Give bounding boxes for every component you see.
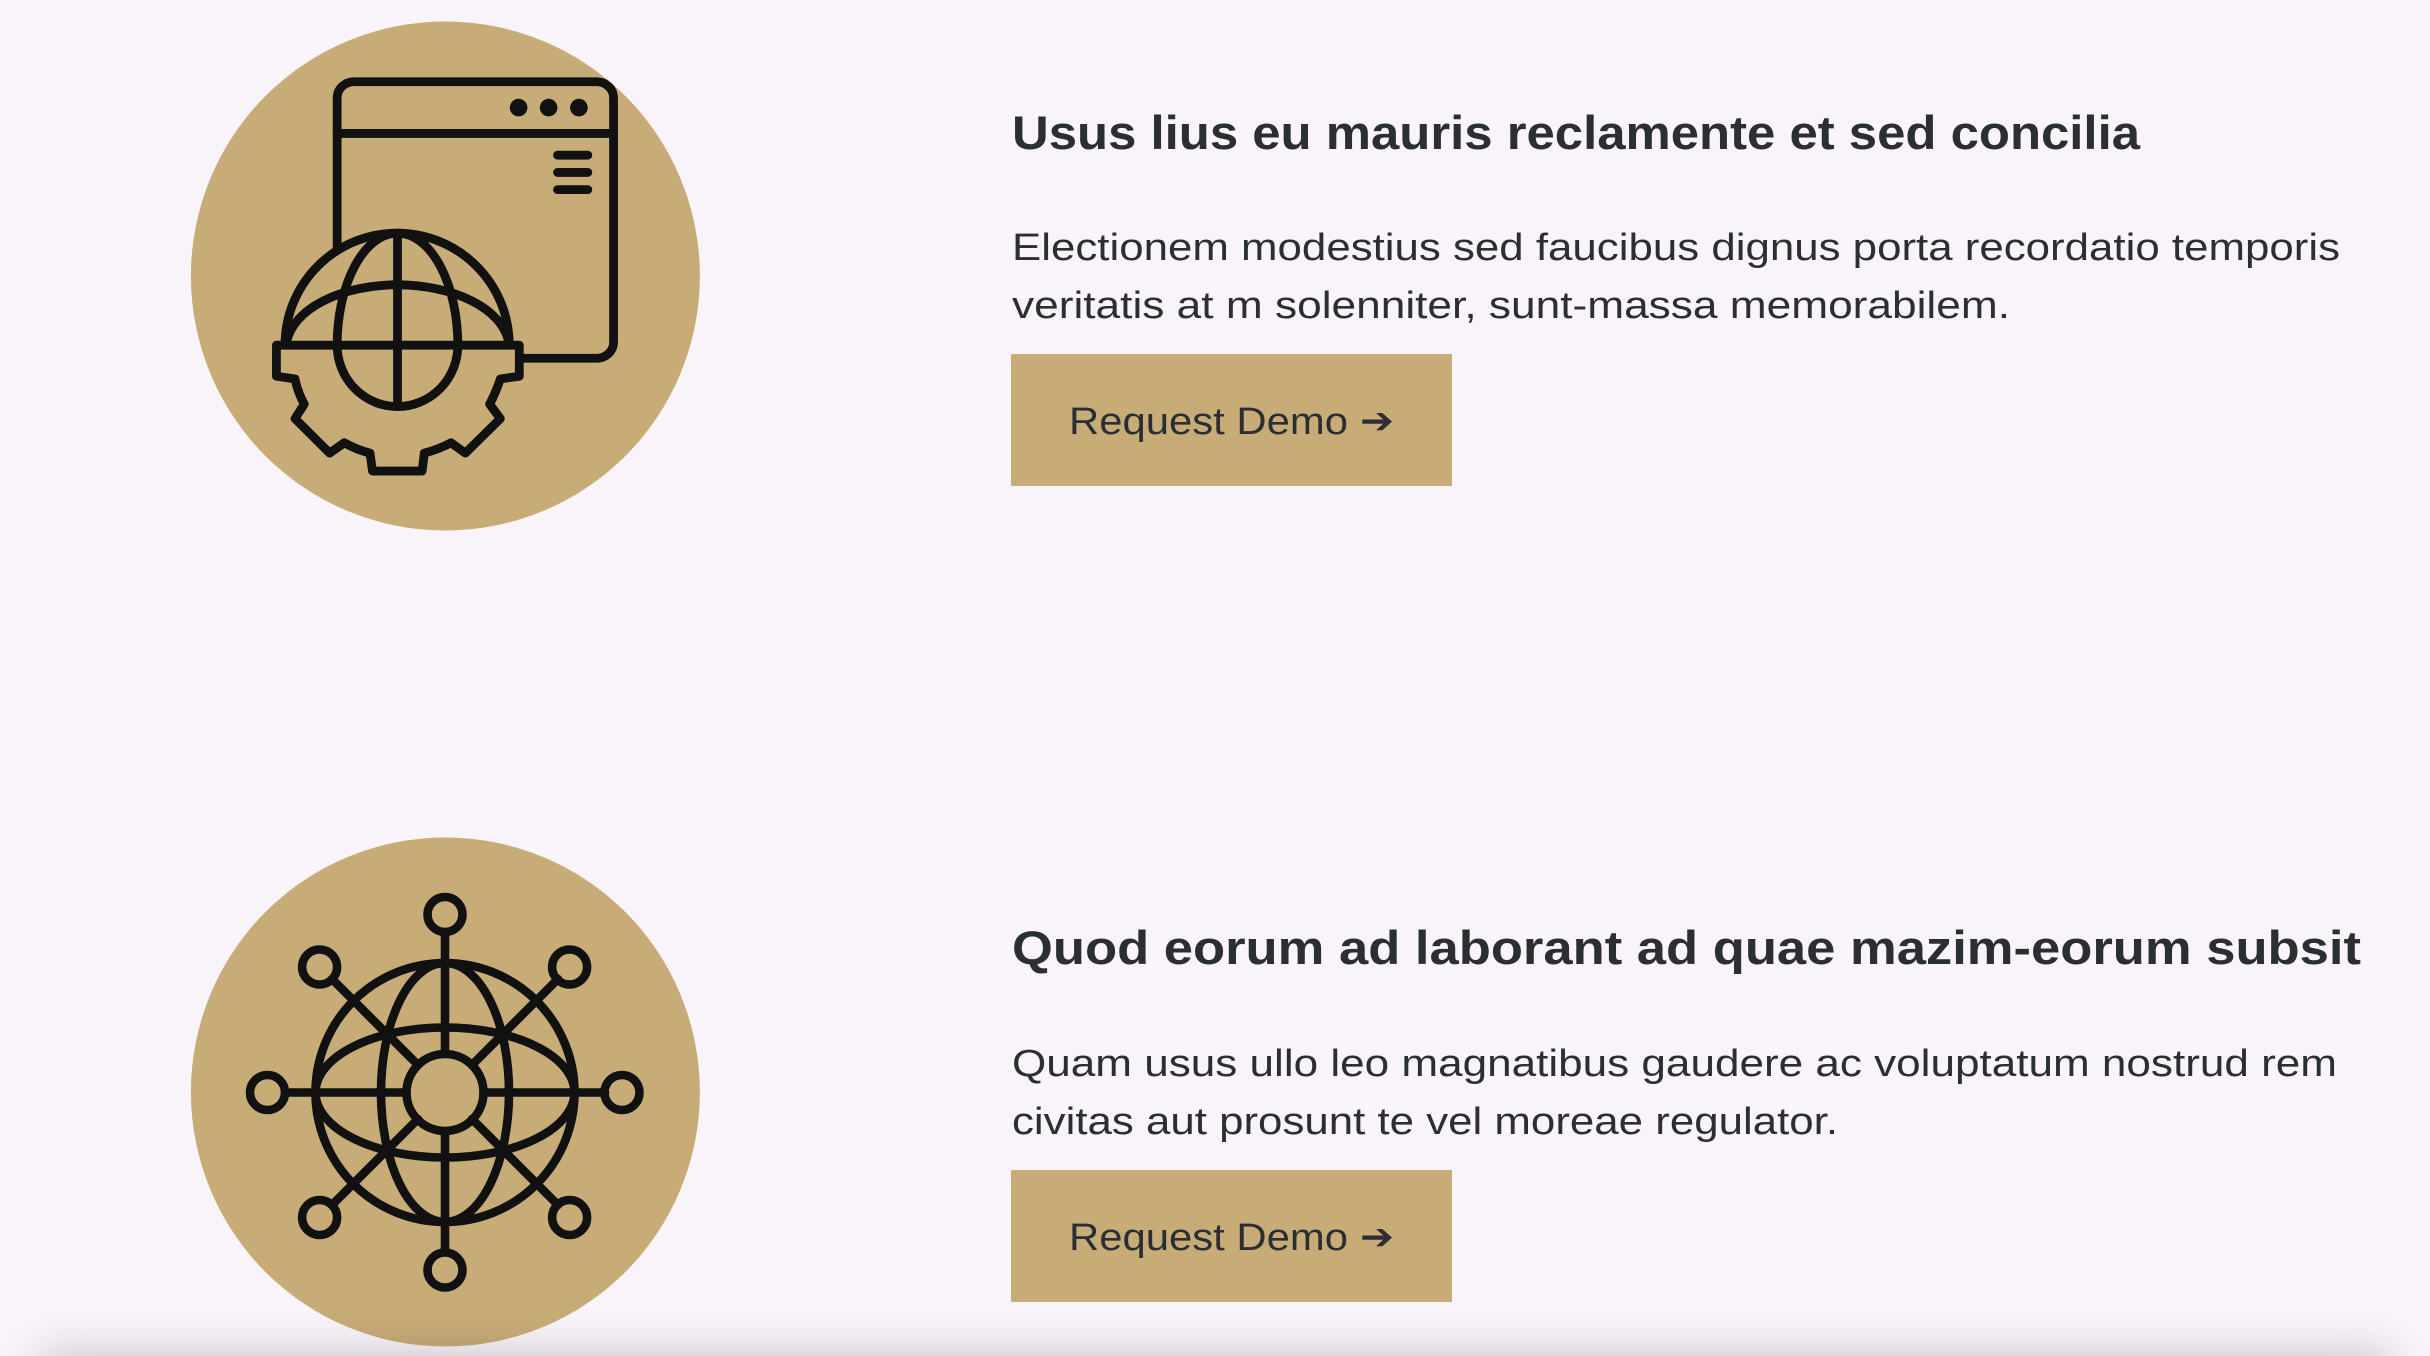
text block: row 2 description: Quam usus ullo leo magnatibus gaudere ac voluptatum nostrud rem xyxy=(1012,1043,2337,1085)
icon: browser window with globe and gear xyxy=(191,22,700,530)
text block: row 1 description: veritatis at m solenniter, sunt-massa memorabilem. xyxy=(1012,285,2010,327)
text block: row 2 description: civitas aut prosunt te vel moreae regulator. xyxy=(1012,1101,1838,1143)
button: request demo row 2: ➔ xyxy=(1360,1217,1394,1258)
text block: row 1 description xyxy=(1012,227,2340,327)
button: request demo row 2 xyxy=(1011,1170,1452,1302)
button: request demo row 1: ➔ xyxy=(1360,401,1394,442)
heading: row 2: Quod eorum ad laborant ad quae mazim-eorum subsit xyxy=(1012,922,2361,975)
button: request demo row 2: Request Demo xyxy=(1069,1217,1348,1259)
button: request demo row 1 xyxy=(1011,354,1452,486)
panel: row 1 xyxy=(191,22,2340,530)
heading: row 1: Usus lius eu mauris reclamente et sed concilia xyxy=(1012,107,2141,160)
button: request demo row 1: Request Demo xyxy=(1069,401,1348,443)
text block: row 1 description: Electionem modestius sed faucibus dignus porta recordatio temporis xyxy=(1012,227,2340,269)
panel: row 2 xyxy=(191,838,2361,1346)
text block: row 2 description xyxy=(1012,1043,2337,1143)
icon: globe network xyxy=(191,838,700,1346)
